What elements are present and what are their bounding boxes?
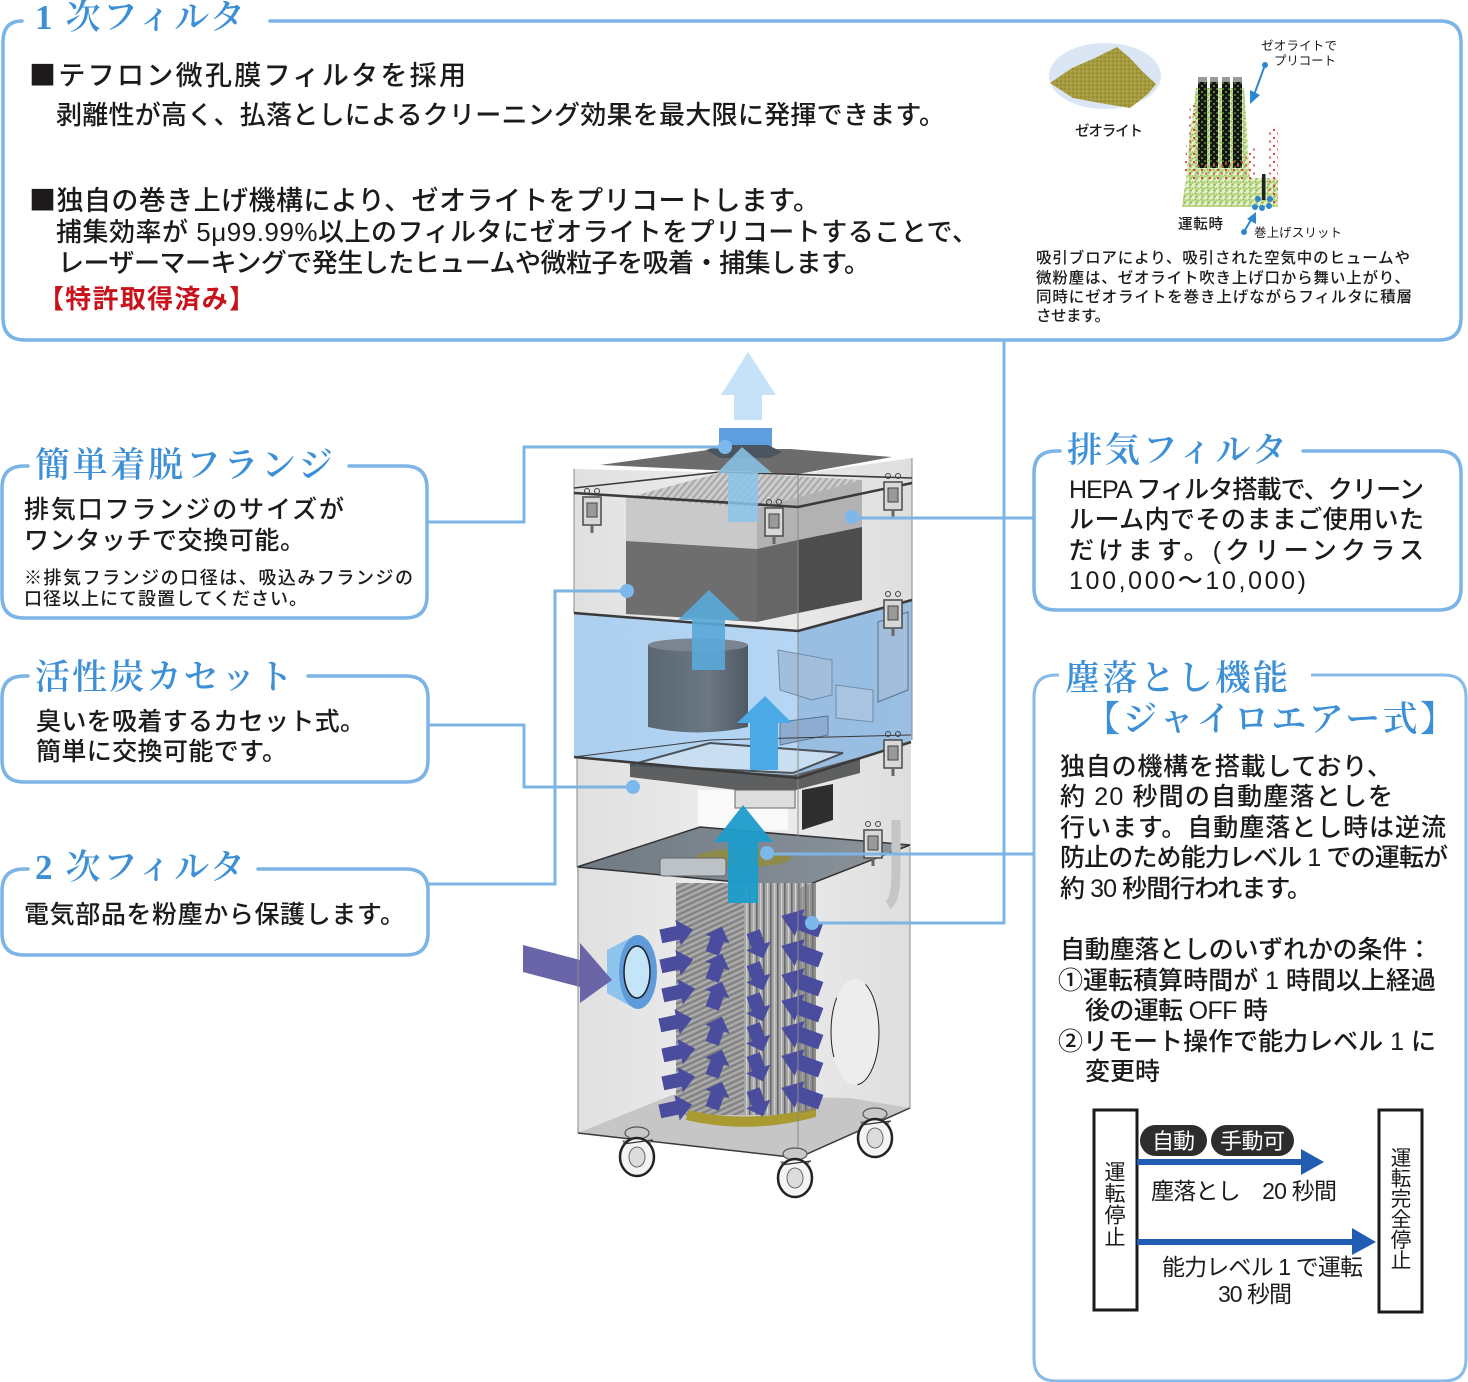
casters <box>620 1108 892 1197</box>
text block: 巻き上げ機構: 捕集効率が 5μ99.99%以上のフィルタにゼオライトをプリコートすることで、 <box>56 217 978 247</box>
label: ゼオライト: ゼオライト <box>1075 123 1143 140</box>
text block: flange body <box>24 496 413 609</box>
label: 30秒間: 30 秒間 <box>1218 1281 1292 1307</box>
illustration: dust collector machine <box>523 352 912 1197</box>
text block: flange body: 排気口フランジのサイズが <box>24 496 344 524</box>
label: 塵落とし 20秒間: 塵落とし 20 秒間 <box>1151 1178 1337 1204</box>
panel: 活性炭カセット <box>2 658 428 782</box>
activated carbon cassette <box>648 638 748 732</box>
side pipe <box>888 820 896 905</box>
text block: conditions: 自動塵落としのいずれかの条件： <box>1060 936 1432 964</box>
arrow: 30 seconds <box>1137 1228 1376 1255</box>
text block: dust removal description <box>1060 753 1448 903</box>
HEPA filter <box>626 472 862 622</box>
text block: zeolite description: させます。 <box>1036 307 1110 325</box>
patent note: 【特許取得済み】 <box>38 284 255 314</box>
arrow: through carbon upper <box>678 590 740 670</box>
housing walls <box>574 458 912 1158</box>
housing edges and rims <box>574 458 912 1158</box>
primary filter cylinder <box>676 882 816 1127</box>
text block: テフロン微孔膜フィルタ: ■テフロン微孔膜フィルタを採用 <box>29 54 466 93</box>
box: 運転停止 <box>1094 1110 1137 1310</box>
chart: sequence diagram <box>1094 1110 1422 1312</box>
arrow: slit pointer <box>1241 212 1256 235</box>
hinge plates <box>778 612 908 745</box>
text block: conditions: 後の運転 OFF 時 <box>1085 997 1268 1025</box>
text block: dust removal description: 約 20 秒間の自動塵落としを <box>1060 783 1393 811</box>
arrow: through HEPA <box>717 447 772 522</box>
icon: zeolite powder <box>1049 43 1161 109</box>
top plate <box>600 449 892 474</box>
heading: 簡単着脱フランジ: 簡単着脱フランジ <box>35 446 333 485</box>
arrow: exhaust out <box>721 352 776 420</box>
text block: zeolite description: 吸引ブロアにより、吸引された空気中のヒュームや <box>1036 248 1410 267</box>
arrow: through carbon lower <box>737 696 792 770</box>
label: ゼオライトでプリコート: ゼオライトで <box>1261 39 1337 53</box>
panel: 排気フィルタ <box>1034 431 1461 610</box>
arrow: from primary filter <box>714 805 773 903</box>
panel: 簡単着脱フランジ <box>2 446 427 618</box>
text block: 巻き上げ機構: ■独自の巻き上げ機構により、ゼオライトをプリコートします。 <box>29 179 820 218</box>
box: 運転完全停止: 運転完全停止 <box>1387 1147 1411 1270</box>
text block: conditions: ②リモート操作で能力レベル 1 に <box>1058 1028 1436 1056</box>
text block: HEPA body <box>1069 476 1424 595</box>
text block: flange body: ※排気フランジの口径は、吸込みフランジの <box>24 568 413 588</box>
box: 運転完全停止 <box>1379 1110 1422 1312</box>
heading: 活性炭カセット: 活性炭カセット <box>35 658 293 697</box>
text block: carbon body: 臭いを吸着するカセット式。 <box>36 708 365 736</box>
connector: 排気フィルタ <box>845 510 1034 524</box>
text block: 巻き上げ機構: レーザーマーキングで発生したヒュームや微粒子を吸着・捕集します。 <box>58 248 870 278</box>
connector: フランジ <box>427 440 732 522</box>
pill: 手動可 <box>1211 1125 1294 1156</box>
connector: 活性炭カセット <box>428 725 640 794</box>
panel: 塵落とし機能 <box>1034 659 1466 1381</box>
cassette tray <box>630 743 860 795</box>
label: ゼオライトでプリコート: プリコート <box>1274 54 1336 68</box>
text block: dust removal description: 独自の機構を搭載しており、 <box>1060 753 1392 781</box>
text block: zeolite description <box>1036 248 1412 325</box>
connector: 2次フィルタ <box>428 584 634 884</box>
mid plate with filter mount <box>577 784 910 888</box>
label: ゼオライトでプリコート <box>1261 39 1337 68</box>
label: 能力レベル1で運転: 能力レベル 1 で運転 <box>1162 1254 1363 1280</box>
latches <box>583 474 902 866</box>
heading: ジャイロエアー式: 【ジャイロエアー式】 <box>1085 700 1455 739</box>
panel: 1次フィルタ <box>3 0 1461 340</box>
text block: 巻き上げ機構 <box>29 179 978 278</box>
arrow: inlet airflow <box>523 943 612 1003</box>
text block: flange body: ワンタッチで交換可能。 <box>24 527 305 555</box>
text block: carbon body: 簡単に交換可能です。 <box>36 738 287 766</box>
pill: 手動可: 手動可 <box>1220 1129 1285 1154</box>
diagram: precoat filter <box>1182 77 1278 211</box>
blue carbon compartment <box>574 600 912 777</box>
text block: conditions <box>1058 936 1436 1086</box>
airflow arrows into filter <box>657 902 826 1124</box>
arrow: precoat pointer <box>1250 62 1268 104</box>
text block: dust removal description: 約 30 秒間行われます。 <box>1060 875 1312 903</box>
text block: conditions: ①運転積算時間が 1 時間以上経過 <box>1058 967 1436 995</box>
panel: 2次フィルタ <box>2 848 428 955</box>
text block: carbon body <box>36 708 365 766</box>
box: 運転停止: 運転停止 <box>1102 1161 1126 1247</box>
label: 巻上げスリット: 巻上げスリット <box>1254 226 1342 240</box>
text block: zeolite description: 同時にゼオライトを巻き上げながらフィルタに積層 <box>1036 287 1412 306</box>
label: 運転時: 運転時 <box>1178 216 1223 233</box>
text block: テフロン微孔膜フィルタ: 剥離性が高く、払落としによるクリーニング効果を最大限に発揮できます。 <box>56 100 945 130</box>
exhaust flange <box>706 428 782 458</box>
text block: HEPA body: HEPA フィルタ搭載で、クリーン <box>1069 476 1424 504</box>
side opening <box>831 979 879 1085</box>
inlet flange <box>607 935 657 1009</box>
heading: 2次フィルタ: 2 次フィルタ <box>35 848 245 887</box>
connector: 1次フィルタ <box>805 340 1004 930</box>
connector: 塵落とし機能 <box>760 846 1034 860</box>
text block: HEPA body: だけます。(クリーンクラス <box>1069 537 1424 565</box>
heading: 排気フィルタ: 排気フィルタ <box>1067 431 1287 470</box>
text block: secondary body: 電気部品を粉塵から保護します。 <box>24 901 405 929</box>
text block: テフロン微孔膜フィルタ <box>29 54 945 130</box>
pill: 自動: 自動 <box>1152 1129 1195 1154</box>
text block: flange body: 口径以上にて設置してください。 <box>24 589 307 609</box>
text block: dust removal description: 行います。自動塵落とし時は逆流 <box>1060 814 1446 842</box>
text block: dust removal description: 防止のため能力レベル 1 での運転が <box>1060 844 1448 872</box>
arrow: 20 seconds <box>1137 1149 1324 1175</box>
text block: HEPA body: 100,000～10,000) <box>1069 567 1306 595</box>
pill: 自動 <box>1140 1125 1207 1156</box>
text block: HEPA body: ルーム内でそのままご使用いた <box>1069 506 1424 534</box>
heading: 塵落とし機能: 塵落とし機能 <box>1065 659 1288 698</box>
text block: conditions: 変更時 <box>1085 1058 1160 1086</box>
text block: zeolite description: 微粉塵は、ゼオライト吹き上げ口から舞い上がり、 <box>1036 268 1410 287</box>
